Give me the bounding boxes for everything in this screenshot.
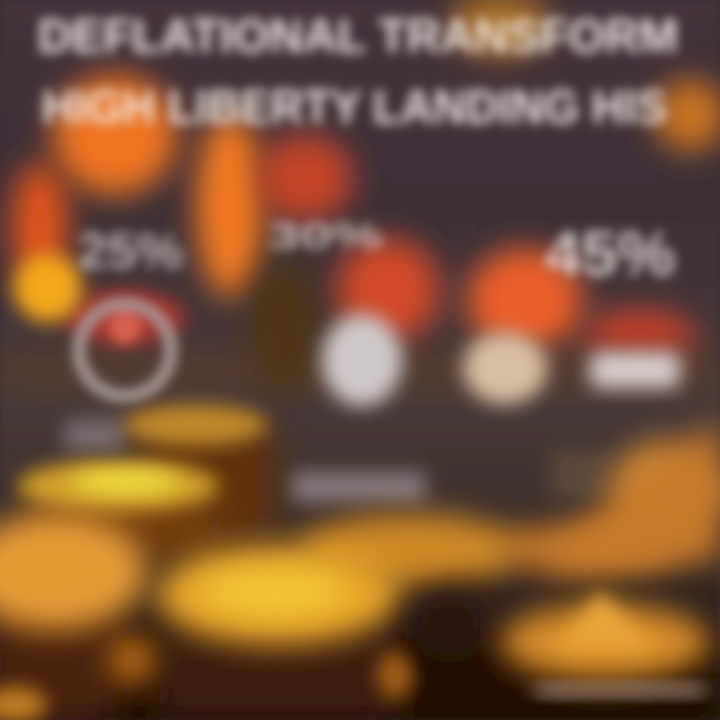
percentage labels: 25% [78,223,183,279]
back right glow [540,420,720,570]
coin stack body: centre [160,625,400,720]
percentage labels: 45% [545,220,675,289]
coin glints [108,634,156,686]
coin top: left [0,514,147,630]
icon: bars [590,352,680,388]
title: HIGH LIBERTY LANDING HIS [42,80,667,133]
icon: ring [79,304,171,396]
coin stack: centre back [300,514,520,586]
yellow glow orb [14,254,82,322]
title [38,9,678,133]
captions [65,420,610,502]
coin stack body: middle [30,490,220,555]
percentage labels [78,215,675,289]
coin stack body: left [0,595,115,720]
gold coin stacks [0,405,720,720]
centre bottle shape [251,260,319,390]
coin heap: right middle band [495,524,685,572]
background glow: flames [0,0,720,390]
coin top: centre [156,545,400,645]
coin pile: right [500,604,710,680]
dark gap [410,586,490,654]
coin stack body: back [140,425,275,540]
icon: person [463,332,547,404]
icon: document [322,314,402,406]
dark base [0,640,720,720]
coin top: middle [18,460,218,512]
footer text [535,684,705,696]
percentage labels: 30% [268,215,383,256]
title: DEFLATIONAL TRANSFORM [38,9,678,62]
coin top: back [123,405,267,445]
